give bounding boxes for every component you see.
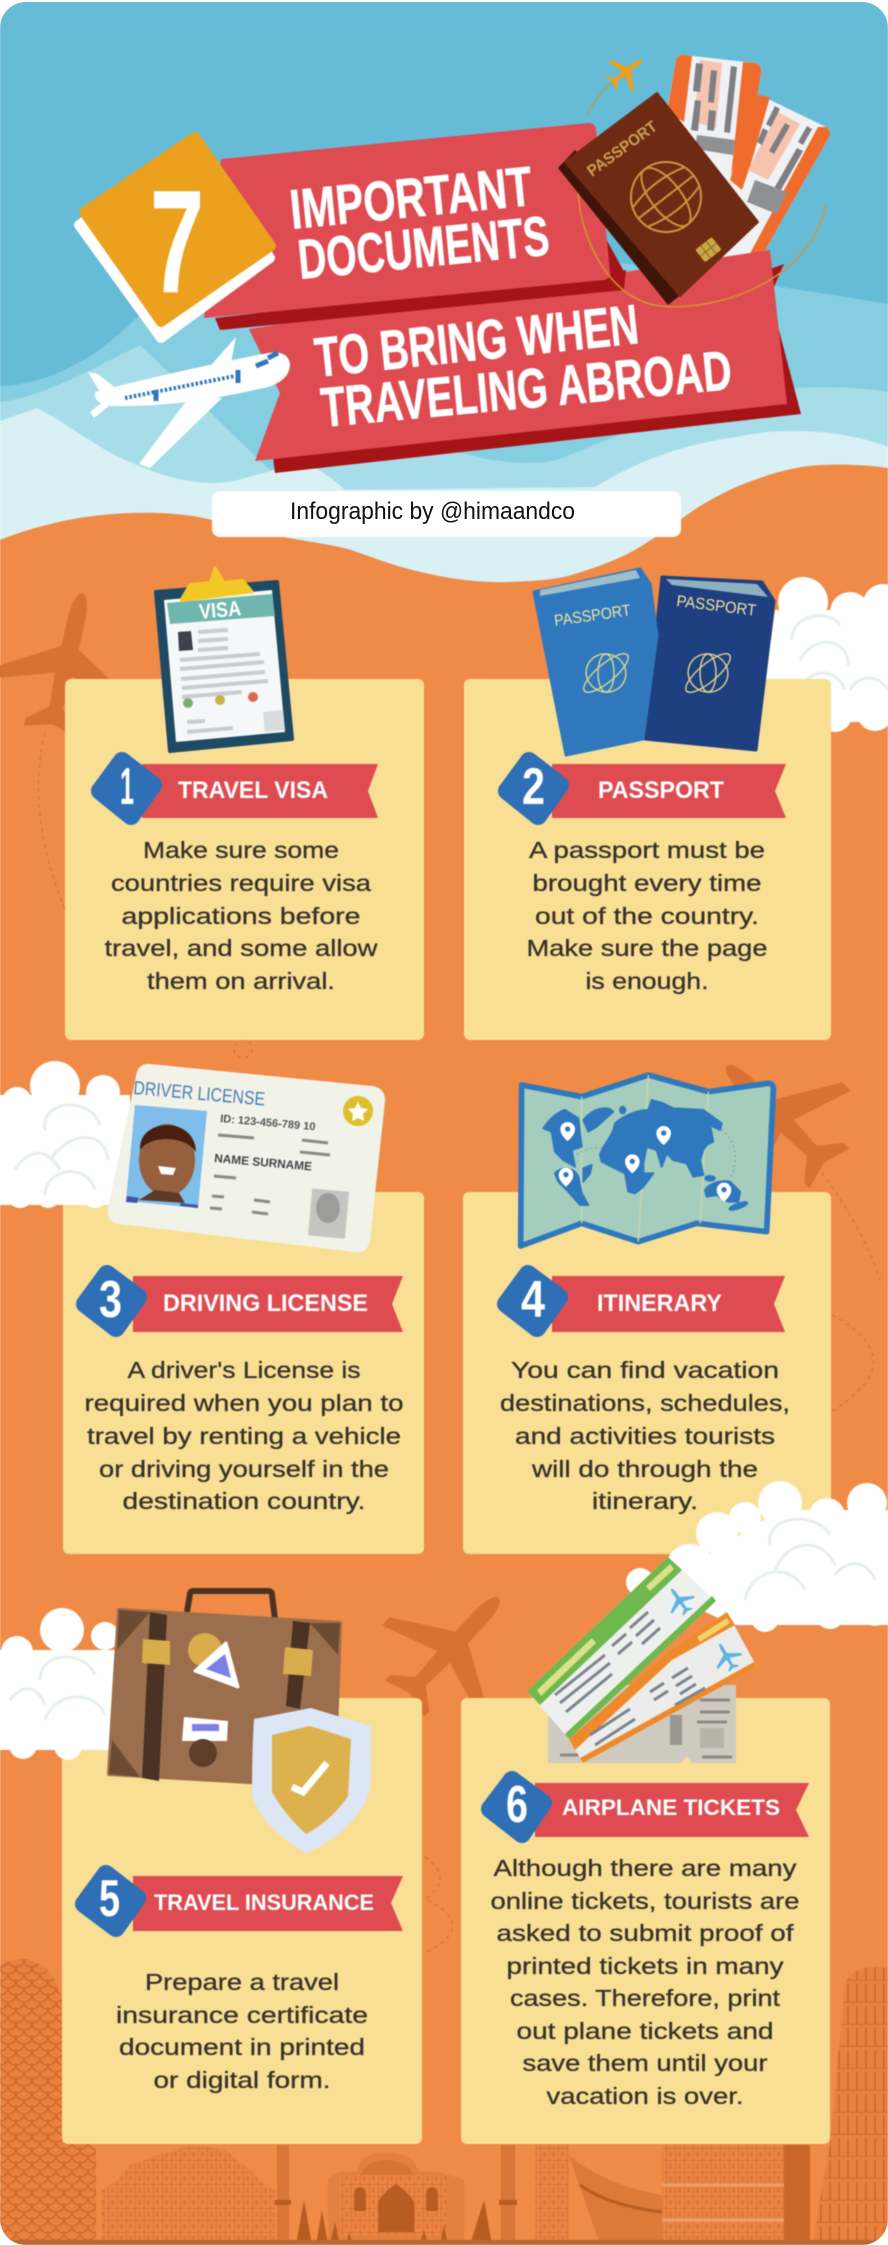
cloud: left of suitcase [0,1608,119,1760]
background: silhouette plane center [382,1596,500,1716]
body text 4 [500,1357,790,1514]
body text 2: is enough. [586,968,708,994]
title: orbit line and small plane [578,45,826,307]
heading 4: itinerary: 4 [521,1271,545,1329]
body text 6: asked to submit proof of [496,1920,794,1946]
heading 1: travel visa [100,758,378,818]
body text 2: Make sure the page [526,935,768,961]
body text 6: save them until your [522,2050,768,2076]
body text 6: Although there are many [494,1855,797,1881]
heading 1: travel visa: TRAVEL VISA [178,777,328,804]
body text 5 [116,1969,368,2093]
background: bottom strip [0,2240,888,2245]
body text 1: applications before [122,903,360,929]
body text 5: insurance certificate [116,2002,368,2028]
body text 5: or digital form. [154,2067,330,2093]
body text 3 [84,1357,404,1514]
attribution pill [212,491,681,537]
body text 3: destination country. [122,1488,366,1514]
body text 2: A passport must be [529,837,765,863]
license heading: DRIVER LICENSE [133,1078,266,1110]
body text 3: A driver's License is [128,1357,360,1383]
title: number badge: 7 [150,160,204,323]
illustration: driver license: NAME SURNAME [214,1151,313,1174]
heading 4: itinerary: ITINERARY [597,1290,722,1317]
cloud: between itinerary and airplane tickets [626,1481,888,1632]
body text 1: travel, and some allow [104,935,378,961]
panel: card 5 [62,1698,422,2144]
heading 5: travel insurance: TRAVEL INSURANCE [154,1890,374,1915]
body text 1: countries require visa [111,870,371,896]
clip [181,567,253,601]
panel: card 1 [65,679,424,1040]
body text 3: or driving yourself in the [99,1456,389,1482]
body text 2 [526,837,768,994]
body text 4: destinations, schedules, [500,1390,790,1416]
heading 5: travel insurance [84,1870,403,1931]
heading 2: passport: PASSPORT [598,777,724,804]
license data: ID: 123-456-789 10 [220,1113,316,1133]
grey back ticket [548,1685,736,1763]
heading 6: airplane tickets: AIRPLANE TICKETS [562,1795,780,1820]
body text 4: You can find vacation [511,1357,779,1383]
heading 6: airplane tickets [490,1776,809,1837]
continents [543,1100,748,1211]
background: leaning tower sketch [812,1967,888,2245]
body text 1: Make sure some [143,837,339,863]
title: documents: DOCUMENTS [295,204,552,291]
background: silhouette plane left [0,593,108,731]
title: important: IMPORTANT [287,154,535,241]
body text 6: vacation is over. [546,2083,744,2109]
title: number badge [79,137,271,338]
cloud: left of driver license [0,1061,130,1208]
background: minarets and Taj Mahal sketch [275,2145,517,2245]
illustration: world map [521,1075,773,1246]
passport word right: PASSPORT [676,593,757,620]
photo [126,1105,207,1208]
heading 6: airplane tickets: 6 [506,1776,528,1834]
background: dashed flight paths [38,733,880,1953]
heading 2: passport [507,758,786,818]
illustration: two passports [534,569,774,755]
green ticket [527,1557,716,1739]
body text 6 [490,1855,800,2109]
background: merlion sketch [0,1959,96,2245]
title: upper red banner [204,123,626,330]
panel: card 6 [461,1698,830,2144]
visa word: VISA [198,597,242,624]
title: ticket front [722,94,831,258]
background: layered waves [0,262,888,583]
panel: card 2 [464,679,831,1040]
body text 3: required when you plan to [84,1390,404,1416]
passport word: PASSPORT [584,118,661,180]
map pins [559,1122,731,1201]
title: traveling abroad: TRAVELING ABROAD [318,338,734,439]
body text 3: travel by renting a vehicle [87,1423,401,1449]
passport word left: PASSPORT [553,602,632,630]
illustration: title plane [88,337,290,468]
illustration: airplane tickets [527,1557,757,1763]
globe [629,160,703,234]
background: silhouette plane right [726,1064,850,1188]
body text 2: brought every time [532,870,762,896]
body text 6: out plane tickets and [516,2018,774,2044]
icon: shield with check [252,1708,371,1853]
body text 6: cases. Therefore, print [510,1985,781,2011]
heading 2: passport: 2 [522,758,545,816]
body text 5: document in printed [119,2034,365,2060]
heading 3: driving license: 3 [99,1271,122,1329]
background: palace sketch [102,2145,275,2245]
heading 5: travel insurance: 5 [99,1870,120,1928]
background: colosseum and tower sketch [535,2145,810,2245]
heading 3: driving license [85,1271,403,1332]
illustration: driver license [108,1064,385,1252]
illustration: suitcase [109,1591,340,1787]
panel: card 4 [463,1192,831,1554]
body text 1 [104,837,378,994]
heading 3: driving license: DRIVING LICENSE [163,1290,368,1317]
cloud: right of passports [754,577,888,732]
body text 6: printed tickets in many [506,1953,784,1979]
body text 4: itinerary. [592,1488,698,1514]
orange ticket [569,1612,757,1763]
title: lower red banner [249,250,801,473]
body text 6: online tickets, tourists are [490,1888,800,1914]
body text 1: them on arrival. [147,968,335,994]
star badge [343,1096,373,1126]
background: orange ground [0,465,888,2245]
heading 1: travel visa: 1 [120,758,134,816]
body text 4: and activities tourists [515,1423,775,1449]
body text 5: Prepare a travel [145,1969,339,1995]
attribution text: Infographic by @himaandco [290,498,575,525]
title: brown passport [558,93,758,305]
title: ticket back [667,55,761,197]
title: to bring when: TO BRING WHEN [312,292,641,389]
background: sky [0,2,888,387]
chip [695,237,722,262]
body text 2: out of the country. [535,903,759,929]
heading 4: itinerary [506,1271,785,1332]
body text 4: will do through the [531,1456,758,1482]
panel: card 3 [63,1192,424,1554]
globes [579,648,735,698]
illustration: visa clipboard [156,567,292,751]
